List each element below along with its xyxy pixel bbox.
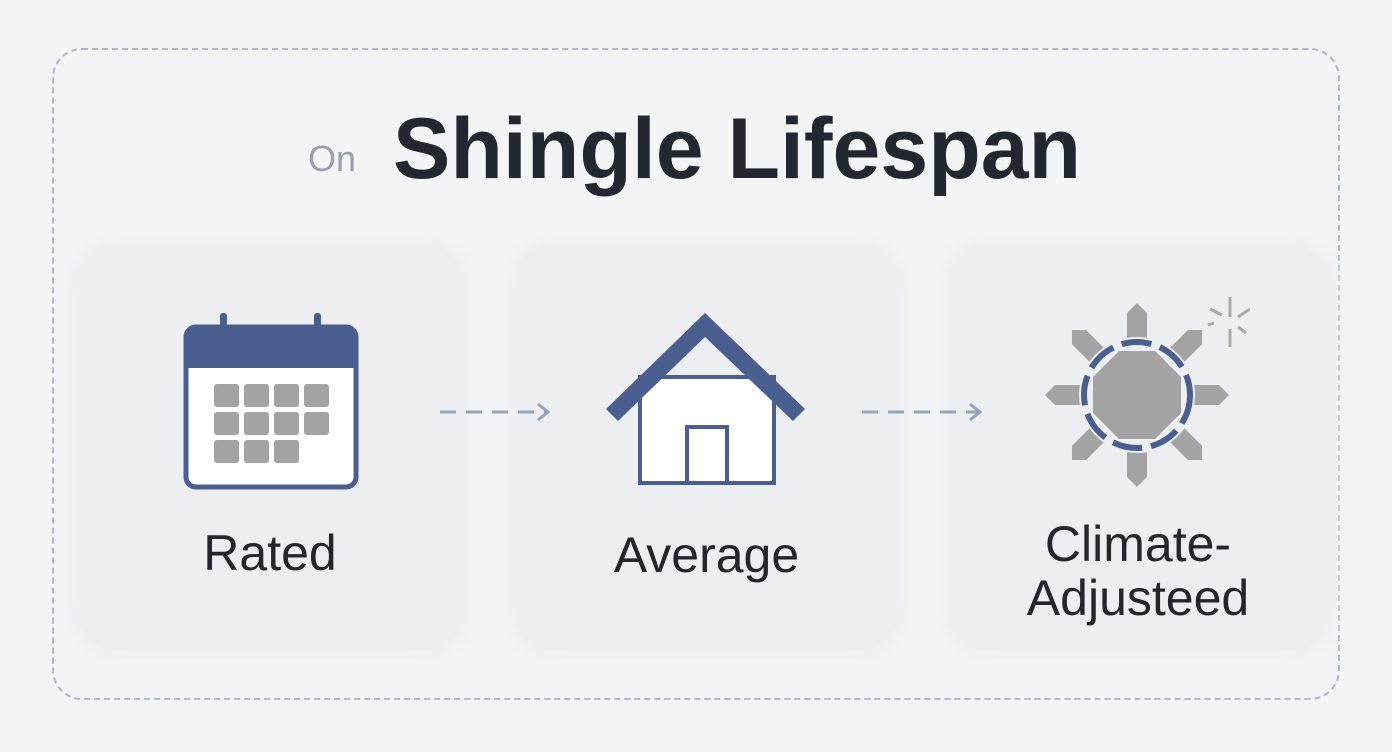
arrow 1 [440, 403, 550, 421]
icon: house [606, 313, 805, 485]
label: average: Average [614, 527, 799, 583]
panel: climate-adjusted [948, 245, 1328, 650]
label: climate-adjusted [1026, 516, 1249, 626]
arrow 2 [862, 403, 982, 421]
panel: average [515, 245, 898, 650]
panel: rated [78, 245, 462, 650]
label: climate-adjusted: Adjusteed [1027, 570, 1249, 626]
icon: calendar [184, 313, 358, 490]
title: On [308, 138, 356, 179]
label: rated: Rated [203, 525, 337, 581]
label: climate-adjusted: Climate- [1045, 516, 1231, 572]
title: Shingle Lifespan [393, 101, 1081, 197]
icon: sun [1045, 297, 1250, 487]
